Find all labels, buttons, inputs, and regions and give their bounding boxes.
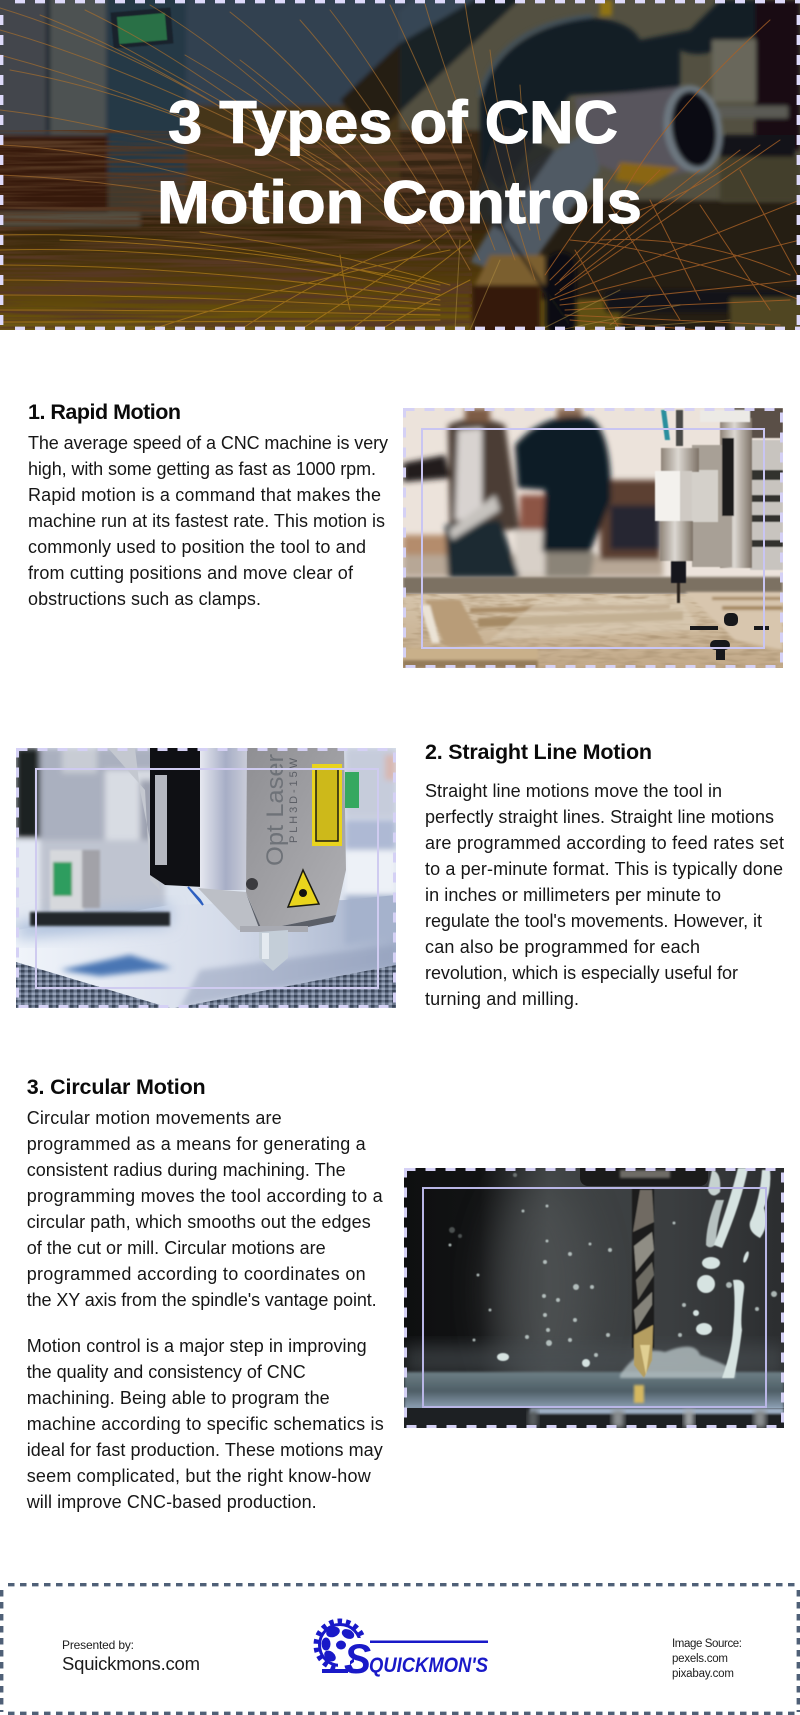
- panel: straight line motion: [16, 740, 784, 1009]
- text: image source: pexels.com: [672, 1653, 728, 1665]
- text: straight line motion description: revolution, which is especially useful for: [425, 963, 738, 983]
- logo rule: [370, 1640, 488, 1643]
- heading: rapid motion: 1. Rapid Motion: [28, 400, 181, 424]
- text: straight line motion description: perfectly straight lines. Straight line motions: [425, 807, 774, 827]
- text: presented by: [62, 1638, 200, 1674]
- sparks: [0, 3, 800, 330]
- photo inner frame: [423, 1188, 766, 1407]
- text: rapid motion description: Rapid motion is a command that makes the: [28, 485, 381, 505]
- text: straight line motion description: are programmed according to feed rates set: [425, 833, 784, 853]
- text: image source: [672, 1638, 742, 1680]
- title: 3 Types of CNC: [168, 89, 618, 156]
- text: circular motion description: programmed according to coordinates on: [27, 1264, 366, 1284]
- laser head: PLH3D-15W: [288, 757, 300, 843]
- machine spindle: [655, 408, 783, 603]
- text: straight line motion description: in inches or millimeters per minute to: [425, 885, 721, 905]
- text: rapid motion description: [28, 433, 388, 609]
- logo wordmark: [344, 1635, 488, 1682]
- panel: circular motion: [26, 1075, 784, 1512]
- text: rapid motion description: from cutting positions and move clear of: [28, 563, 354, 583]
- water surface: [404, 1372, 784, 1428]
- text: straight line motion description: turning and milling.: [425, 989, 579, 1009]
- coolant streams and droplets: [448, 1168, 777, 1378]
- text: straight line motion description: can also be programmed for each: [425, 937, 700, 957]
- text: straight line motion description: Straight line motions move the tool in: [425, 781, 722, 801]
- text: circular motion description: programming moves the tool according to a: [27, 1186, 384, 1206]
- title: [157, 89, 642, 236]
- photo dashed border: [404, 410, 782, 666]
- text: circular motion description: consistent radius during machining. The: [27, 1160, 346, 1180]
- text: rapid motion description: obstructions such as clamps.: [28, 589, 261, 609]
- title: Motion Controls: [157, 169, 642, 236]
- text: closing paragraph: seem complicated, but the right know-how: [27, 1466, 372, 1486]
- label: laser brand: Opt Laser: [262, 754, 289, 866]
- logo wordmark: QUICKMON'S: [369, 1654, 488, 1677]
- heading: straight line motion: 2. Straight Line Motion: [425, 740, 652, 764]
- text: closing paragraph: Motion control is a major step in improving: [27, 1336, 367, 1356]
- connector: [50, 850, 100, 910]
- photo dashed border: [18, 750, 394, 1006]
- heading: circular motion: 3. Circular Motion: [27, 1075, 206, 1099]
- panel: footer: [2, 1585, 800, 1713]
- panel: header banner: [0, 0, 800, 337]
- laser head: [108, 748, 359, 971]
- text: circular motion description: programmed as a means for generating a: [27, 1134, 367, 1154]
- text: circular motion description: the XY axis from the spindle's vantage point.: [27, 1290, 377, 1310]
- logo: Squickmon's: [316, 1621, 488, 1682]
- photo: sparks from an angle grinder: [0, 0, 800, 337]
- photo dashed border: [406, 1170, 782, 1426]
- text: circular motion description: of the cut or mill. Circular motions are: [27, 1238, 326, 1258]
- text: closing paragraph: machining. Being able to program the: [27, 1388, 330, 1408]
- text: closing paragraph: will improve CNC-based production.: [26, 1492, 317, 1512]
- drill bit: [632, 1188, 654, 1378]
- text: rapid motion description: high, with some getting as fast as 1000 rpm.: [28, 459, 376, 479]
- text: straight line motion description: [425, 781, 784, 1009]
- photo: drill bit and coolant splash: [404, 1160, 784, 1428]
- splash at the surface: [620, 1347, 735, 1378]
- photo inner frame: [422, 429, 764, 648]
- photo inner frame: [36, 769, 378, 988]
- text: straight line motion description: regulate the tool's movements. However, it: [425, 911, 762, 931]
- icon: green exit sign: [111, 7, 173, 49]
- text: closing paragraph: [26, 1336, 384, 1512]
- text: presented by: Presented by:: [62, 1638, 134, 1652]
- clamps: [690, 613, 769, 660]
- text: image source: pixabay.com: [672, 1668, 734, 1680]
- text: closing paragraph: machine according to specific schematics is: [27, 1414, 384, 1434]
- text: closing paragraph: ideal for fast production. These motions may: [27, 1440, 383, 1460]
- text: circular motion description: Circular motion movements are: [27, 1108, 282, 1128]
- text: rapid motion description: commonly used to position the tool to and: [28, 537, 366, 557]
- chuck: [580, 1168, 708, 1186]
- text: image source: Image Source:: [672, 1638, 742, 1650]
- panel: rapid motion: [28, 400, 783, 668]
- text: rapid motion description: machine run at its fastest rate. This motion is: [28, 511, 385, 531]
- icon: gear: [316, 1621, 374, 1672]
- photo: laser head over a metal sheet: [16, 748, 396, 1008]
- text: straight line motion description: to a per-minute format. This is typically done: [425, 859, 783, 879]
- footer dashed border: [2, 1585, 800, 1713]
- text: circular motion description: circular path, which smooths out the edges: [27, 1212, 371, 1232]
- photo: CNC router in a workshop: [403, 408, 783, 668]
- text: circular motion description: [27, 1108, 384, 1310]
- text: presented by: Squickmons.com: [62, 1653, 200, 1674]
- header dashed border: [2, 2, 800, 330]
- text: rapid motion description: The average speed of a CNC machine is very: [28, 433, 388, 453]
- text: closing paragraph: the quality and consistency of CNC: [27, 1362, 306, 1382]
- logo wordmark: S: [344, 1635, 371, 1682]
